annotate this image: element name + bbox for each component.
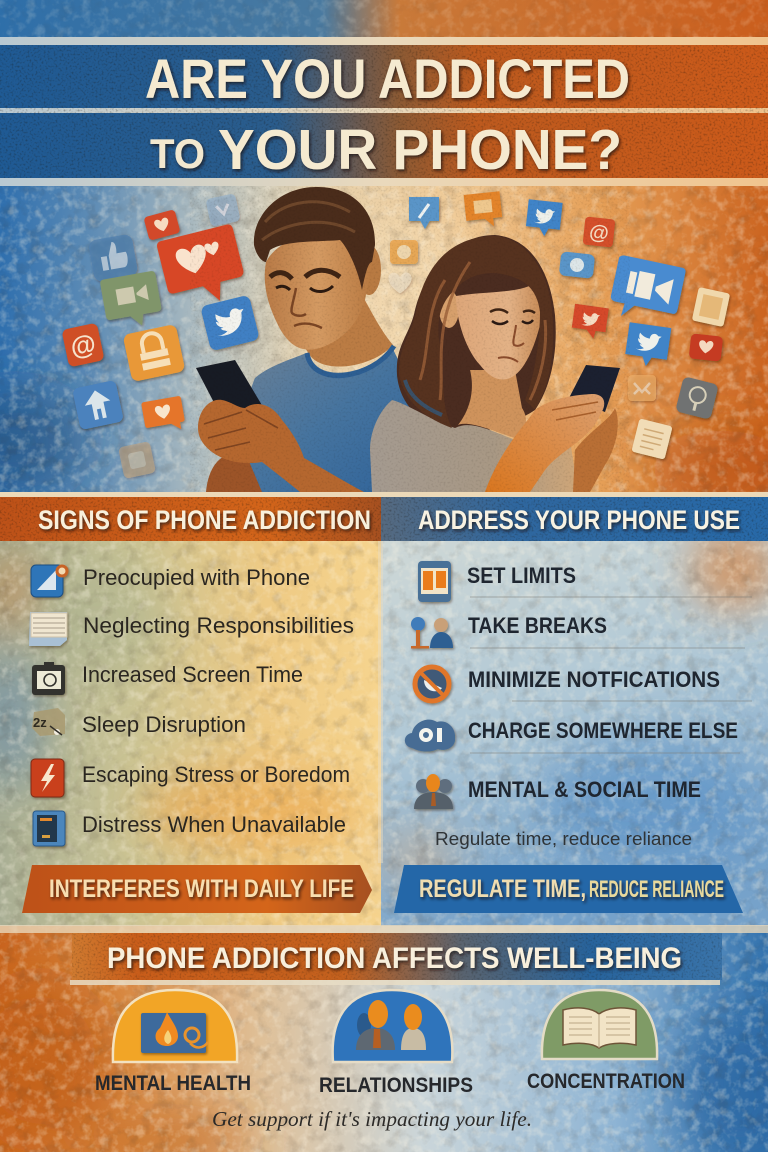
icon: orange heart bubble <box>141 396 186 435</box>
man face <box>264 240 366 350</box>
background: address panel <box>381 541 768 926</box>
caption: Regulate time, reduce reliance <box>435 829 692 849</box>
woman hair front <box>399 236 553 428</box>
icon: red heart <box>689 333 723 362</box>
action: take breaks: TAKE BREAKS <box>468 613 607 638</box>
icon: home figure <box>72 380 124 430</box>
icon: open book tile <box>542 990 657 1059</box>
effect: mental health: MENTAL HEALTH <box>95 1072 251 1095</box>
sign: neglecting: Neglecting Responsibilities <box>83 613 354 638</box>
icon: orange screen <box>465 192 502 227</box>
title bands <box>0 0 768 186</box>
sign: sleep <box>32 708 246 737</box>
heading band: well-being <box>0 925 768 985</box>
icon: faint mail <box>628 375 656 401</box>
icon: twitter bubble large <box>625 323 670 367</box>
icon: faint heart <box>388 273 412 293</box>
man ear <box>366 248 381 295</box>
panel: signs of phone addiction <box>0 497 381 913</box>
man nose and mouth <box>291 288 322 328</box>
woman neck <box>458 370 526 438</box>
action: mental and social time: MENTAL & SOCIAL TIME <box>468 777 701 802</box>
icon: tablet <box>418 561 451 602</box>
icon: bolt <box>31 759 64 797</box>
panel: affects well-being <box>0 925 768 1131</box>
sign: sleep: Sleep Disruption <box>82 712 246 737</box>
action: set limits <box>418 561 576 602</box>
man <box>196 187 415 492</box>
icon: at sign: @ <box>588 221 610 245</box>
sign: preoccupied: Preocupied with Phone <box>83 565 310 590</box>
icon: blue app with pin <box>31 565 67 597</box>
icon: orange heart tile <box>390 240 418 264</box>
icon: big heart bubble <box>156 223 249 312</box>
man forearm far <box>206 458 262 492</box>
icon: at sign <box>583 217 615 247</box>
man t-shirt <box>250 350 410 492</box>
action: minimize notifications: MINIMIZE NOTFICATIONS <box>468 667 720 692</box>
woman phone <box>569 365 620 412</box>
hero: floating app icons, left cluster <box>61 193 260 479</box>
icon: thumbs up <box>88 233 138 282</box>
icon: faded chat <box>205 193 241 227</box>
woman <box>370 235 620 492</box>
title line 2: to: TO <box>150 130 205 177</box>
divider band above columns <box>0 492 768 497</box>
heading band: address <box>381 497 768 541</box>
man collar <box>307 346 394 376</box>
background: signs panel <box>0 541 381 926</box>
icon: grey bulb <box>675 376 719 420</box>
background: hero scene <box>0 186 768 492</box>
action: mental and social time <box>414 774 701 809</box>
icon: cloud with gear <box>405 720 455 752</box>
sign: distress: Distress When Unavailable <box>82 812 346 837</box>
action: take breaks <box>411 613 607 648</box>
icon: beige note <box>692 287 730 327</box>
row dividers <box>470 597 752 753</box>
man brows and eyes <box>270 270 340 279</box>
icon: red bird bubble <box>571 304 609 340</box>
icon: blue chat <box>410 198 438 227</box>
icon: at sign <box>61 323 105 367</box>
icon: cream note <box>631 418 673 460</box>
woman ear <box>440 292 458 328</box>
effect: relationships: RELATIONSHIPS <box>319 1074 473 1097</box>
sign: neglecting <box>29 612 354 646</box>
woman face <box>456 286 540 380</box>
icon: small heart bubble <box>143 209 181 241</box>
icon: sleep z <box>32 708 65 736</box>
ribbon text start: REGULATE TIME, <box>419 875 586 903</box>
sign: stress <box>31 759 350 797</box>
man neck <box>306 300 393 366</box>
sign: screen time: Increased Screen Time <box>82 662 303 687</box>
ribbon: interferes with daily life: INTERFERES WITH DAILY LIFE <box>49 875 354 903</box>
heading band: signs: SIGNS OF PHONE ADDICTION <box>38 505 371 535</box>
woman shirt <box>370 400 578 492</box>
ribbon: regulate time <box>394 865 743 913</box>
woman hair back <box>397 235 556 432</box>
icon: at sign: @ <box>67 328 99 362</box>
heading band: signs <box>0 497 381 541</box>
icon: group <box>414 774 453 809</box>
icon: person with post <box>411 617 453 648</box>
icon: two people tile <box>333 990 452 1062</box>
icon: twitter bubble <box>526 200 561 236</box>
effect: mental health <box>95 990 251 1095</box>
woman front arm and hand <box>485 394 604 492</box>
icon: flame tile <box>113 990 237 1062</box>
icon: dark book <box>33 811 65 846</box>
action: minimize notifications <box>415 667 720 701</box>
man hands <box>198 400 364 492</box>
hero: floating app icons, right cluster <box>388 192 730 460</box>
icon: blue circle tile <box>559 251 595 279</box>
sign: stress: Escaping Stress or Boredom <box>82 762 350 787</box>
icon: sleep z: 2z <box>33 715 47 730</box>
sign: screen time <box>32 662 303 695</box>
icon: video bubble <box>100 270 164 331</box>
icon: twitter tile <box>200 295 260 351</box>
action: set limits: SET LIMITS <box>467 563 576 588</box>
title <box>145 47 630 182</box>
man phone <box>196 360 262 408</box>
icon: no notifications <box>415 667 449 701</box>
effect: concentration: CONCENTRATION <box>527 1070 685 1093</box>
effect: relationships <box>319 990 473 1097</box>
effect: concentration <box>527 990 685 1093</box>
woman back arm <box>573 408 618 492</box>
icon: lock <box>123 324 185 382</box>
woman brows and eyes <box>490 309 535 313</box>
title line 2: your phone: YOUR PHONE? <box>218 118 622 182</box>
man hair <box>254 187 375 290</box>
title line 1: ARE YOU ADDICTED <box>145 47 630 110</box>
ribbon: interferes with daily life <box>22 865 372 913</box>
heading band: well-being: PHONE ADDICTION AFFECTS WELL-BEING <box>107 942 682 975</box>
woman nose and mouth <box>498 325 524 362</box>
hero: couple illustration <box>196 187 620 492</box>
icon: clock screen <box>32 662 65 695</box>
closing note: Get support if it's impacting your life. <box>212 1107 532 1131</box>
background: well-being panel <box>0 926 768 1152</box>
sign: preoccupied <box>31 565 310 597</box>
panel: address your phone use <box>381 497 768 913</box>
action: charge elsewhere <box>405 718 738 752</box>
column divider <box>378 541 383 863</box>
icon: big video bubble <box>607 254 686 327</box>
background: top strip <box>0 0 768 186</box>
icon: faded note <box>118 441 156 479</box>
icon: paper stack <box>29 612 67 646</box>
sign: distress <box>33 811 346 846</box>
